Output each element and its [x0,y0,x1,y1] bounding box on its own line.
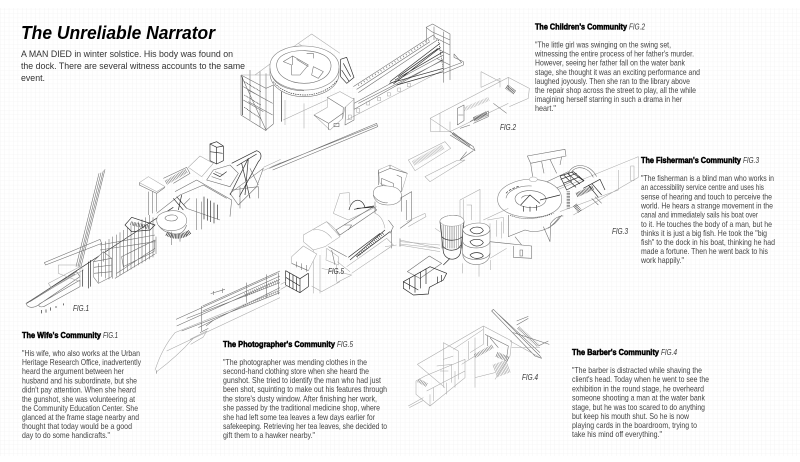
figure labels: FIG.4 [522,372,538,382]
text block: Photographer's account: "The photographer was mending clothes in the [223,357,367,367]
text block: introduction: the dock. There are several witness accounts to the same [21,61,245,72]
text block: Fisherman's account: fish" to the dock in his boat, thinking he had [641,237,775,247]
text block: Children's account [534,40,700,113]
text block: Fisherman's account: to it. He touches the body of a man, but he [641,219,772,229]
text block: Children's account: However, seeing her father fall on the water bank [535,58,686,68]
text block: introduction: event. [21,73,45,84]
text block: Photographer's account: the store's dusty window. After finishing her work, [223,394,377,404]
panel: The Photographer's Community [223,339,387,440]
text block: Barber's account: but keep his mouth shut. So he is now [572,411,690,421]
heading: The Children's Community: FIG.2 [629,22,645,32]
drawing: Photographer's Community pier [155,271,287,374]
text block: Wife's account [22,348,142,440]
text block: Photographer's account: been shot, squinting to make out his features through [223,384,387,394]
text block: Photographer's account: she passed by the traditional medicine shop, where [223,402,380,412]
figure labels: FIG.2 [500,122,516,132]
text block: Fisherman's account: thinks it is just a big fish. He took the "big [641,228,767,238]
heading: The Wife's Community: FIG.1 [103,330,118,340]
text block: introduction: A MAN DIED in winter solstice. His body was found on [21,49,233,60]
text block: Fisherman's account: world. He hears a strange movement in the [640,200,773,210]
text block: Fisherman's account: work happily." [640,255,684,265]
text block: Children's account: heart." [535,103,556,113]
drawing: Wife's Community building [26,142,281,313]
drawing: Photographer's Community building [286,165,440,293]
text block: Barber's account: "The barber is distracted while shaving the [572,365,702,375]
heading: The Fisherman's Community: FIG.3 [743,155,759,165]
panel: The Children's Community [534,22,700,113]
text block: Barber's account: stage, but he was too scared to do anything [572,402,705,412]
text block: Wife's account: day to do some handicrafts." [22,430,110,440]
text block: Photographer's account: safekeeping. Retrieving her tea leaves, she decided to [223,421,387,431]
drawing: Children's Community corridor [408,72,529,182]
text block: Fisherman's account: sense of hearing and touch to perceive the [641,191,772,201]
text block: Wife's account: glanced at the frame stage nearby and [22,412,139,422]
heading: The Barber's Community: The Barber's Community [572,347,659,357]
text block: Fisherman's account: "The fisherman is a blind man who works in [641,173,774,183]
text block: Fisherman's account [640,173,775,265]
text block: Children's account: "The little girl was swinging on the swing set, [535,40,671,50]
figure labels: FIG.5 [328,266,344,276]
figure labels: FIG.1 [73,303,89,313]
text block: Children's account: witnessing the entire process of her father's murder. [534,48,694,58]
text block: Wife's account: thought that today would be a good [22,421,132,431]
text block: Photographer's account [223,357,387,440]
text block: Children's account: stage, she thought it was an exciting performance and [535,67,700,77]
heading: The Wife's Community: The Wife's Community [22,330,101,340]
text block: Photographer's account: gunshot. She tried to identify the man who had just [223,375,382,385]
text block: Photographer's account: gift them to a hawker nearby." [223,430,315,440]
figure labels [73,122,628,382]
panel: The Fisherman's Community [640,155,775,265]
text block: Barber's account: client's head. Today when he went to see the [572,374,709,384]
panel: The Wife's Community [22,330,142,440]
title: The Unreliable Narrator [21,23,216,43]
heading: The Photographer's Community: The Photographer's Community [223,339,335,349]
text block: Wife's account: husband and his subordinate, but she [22,376,137,386]
heading: The Children's Community: The Children's Community [535,22,627,32]
text block: introduction [21,49,245,84]
text block: Barber's account: someone shooting a man at the water bank [572,392,706,402]
text block: Children's account: the repair shop across the street to play, all the while [535,85,696,95]
text block: Barber's account: exhibition in the round stage, he overheard [572,384,704,394]
text block: Children's account: laughed joyously. Then she ran to the library above [535,76,690,86]
text block: Barber's account: playing cards in the boardroom, trying to [572,420,697,430]
figure labels: FIG.3 [612,226,628,236]
drawing: Fisherman's Community building [400,149,638,295]
text block: Wife's account: "His wife, who also works at the Urban [22,348,140,358]
text block: Photographer's account: second-hand clothing store when she heard the [223,366,369,376]
panel: The Barber's Community [572,347,709,439]
text block: Photographer's account: she had left some tea leaves a few days earlier for [223,412,375,422]
drawing: top axonometric building of the Children's Community [241,24,463,170]
text block: Children's account: imagining herself starring in such a drama in her [535,94,682,104]
text block: Fisherman's account: canal and immediately sails his boat over [641,210,758,220]
text block: Wife's account: heard the argument between her [22,366,124,376]
text block: Fisherman's account: an accessibility service centre and uses his [641,182,764,192]
drawing: Barber's Community building [408,309,549,408]
text block: Wife's account: Heritage Research Office, inadvertently [22,357,142,367]
text block: Wife's account: didn't pay attention. When she heard [22,385,136,395]
text block: Fisherman's account: made a fortune. Then he went back to his [641,246,768,256]
text block: Wife's account: the gunshot, she was volunteering at [22,394,136,404]
heading: The Photographer's Community: FIG.5 [337,339,353,349]
text block: Barber's account: take his mind off everything." [572,429,662,439]
text block: Wife's account: the Community Education Center. She [22,403,138,413]
heading: The Barber's Community: FIG.4 [661,347,677,357]
text block: Barber's account [572,365,709,439]
heading: The Fisherman's Community: The Fisherman's Community [641,155,741,165]
